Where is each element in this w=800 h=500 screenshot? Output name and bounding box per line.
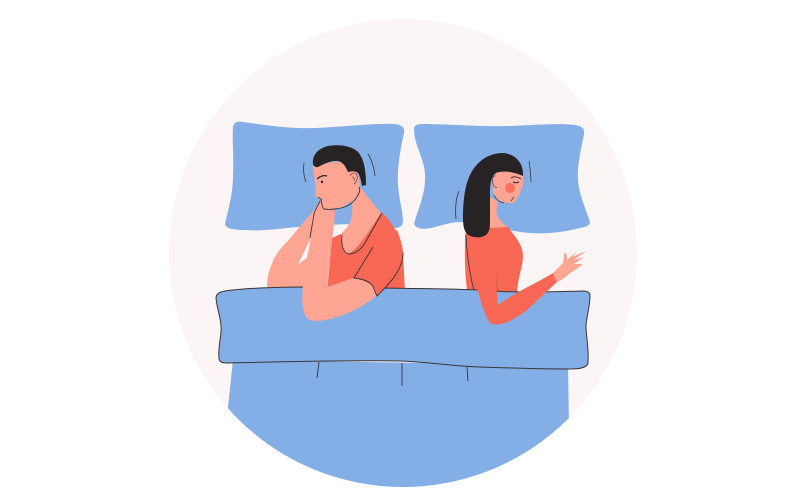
man: neckline	[342, 213, 382, 254]
lower blanket	[228, 362, 569, 487]
woman: ear line	[492, 176, 497, 187]
right pillow	[414, 124, 590, 233]
upper blanket fold	[216, 287, 590, 369]
man: hair	[313, 145, 366, 186]
woman: hair	[463, 153, 523, 237]
man: neck and chest	[341, 187, 381, 254]
man: jaw and neck lines	[310, 187, 360, 238]
man: shirt	[327, 213, 405, 292]
man: ear line	[350, 173, 357, 184]
man: sleeve	[354, 230, 403, 296]
woman: shirt	[465, 225, 523, 294]
man: gap under arm	[298, 238, 311, 264]
woman: arm over blanket	[466, 226, 586, 324]
woman: brow and eye	[511, 177, 521, 183]
man: mouth	[318, 197, 322, 200]
blanket fold lines	[317, 362, 468, 386]
woman: hair over sleeve	[466, 226, 490, 237]
man: motion lines	[304, 154, 375, 182]
illustration: couple in bed	[169, 19, 637, 487]
left pillow	[225, 122, 404, 230]
man: sleeve lines	[354, 247, 403, 296]
woman: motion lines	[456, 161, 531, 219]
man: forearm over blanket	[302, 230, 403, 321]
man: face	[313, 162, 360, 210]
woman: torso lines	[466, 236, 517, 293]
woman: chin line and mouth	[494, 195, 514, 203]
woman: cheek	[505, 183, 515, 193]
man: upper arm and hand	[267, 200, 335, 288]
woman: torso	[456, 153, 531, 294]
woman: neck	[489, 196, 508, 228]
man: eyebrow and eye	[317, 176, 327, 179]
woman: face	[492, 170, 523, 203]
woman: sleeve	[467, 235, 557, 324]
man: forearm	[302, 278, 376, 321]
woman: hand	[553, 250, 586, 282]
background circle	[169, 19, 637, 487]
man: torso	[267, 145, 405, 292]
